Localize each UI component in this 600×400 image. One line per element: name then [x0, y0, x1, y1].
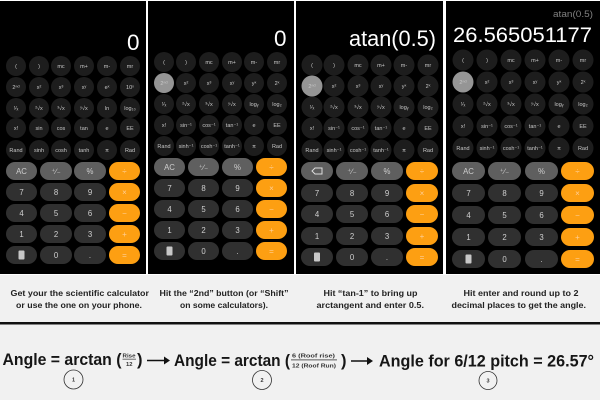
scientific keys: ) [333, 63, 335, 69]
caption: step 1: or use the one on your phone. [16, 300, 142, 310]
number keys: . [386, 253, 388, 262]
operator keys: + [420, 232, 425, 241]
caption: step 3: arctangent and enter 0.5. [316, 300, 424, 310]
scientific keys: EE [579, 124, 587, 130]
scientific keys: ʸ√x [530, 101, 539, 108]
scientific keys: xʸ [533, 80, 537, 86]
number keys: 1 [19, 230, 24, 239]
scientific keys: ( [163, 60, 165, 66]
caption: step 4: Hit enter and round up to 2 [464, 288, 579, 298]
operator keys [256, 158, 287, 260]
scientific keys: π [557, 146, 561, 152]
scientific keys: mr [580, 58, 586, 64]
scientific keys: ²√x [330, 104, 338, 111]
scientific keys: logᵧ [399, 105, 409, 111]
scientific keys: e [252, 123, 256, 129]
operator keys: − [420, 210, 425, 219]
scientific keys: log₂ [423, 105, 433, 111]
scientific keys: sinh⁻¹ [480, 146, 495, 152]
scientific keys: e [105, 126, 109, 132]
scientific keys: sinh [34, 148, 44, 154]
scientific keys: ³√x [57, 105, 65, 112]
scientific keys: ( [15, 64, 17, 70]
scientific keys: sin⁻¹ [180, 123, 192, 129]
scientific keys: tanh⁻¹ [527, 146, 543, 152]
operator keys: = [575, 255, 580, 264]
scientific keys: ²√x [35, 105, 43, 112]
scientific keys: Rad [578, 146, 588, 152]
operator keys: = [122, 251, 127, 260]
scientific keys: x³ [509, 80, 513, 86]
arrow 2 [351, 357, 373, 365]
scientific keys: π [105, 148, 109, 154]
scientific keys: m+ [228, 60, 236, 66]
formula 2: angle equals arctan of roof rise over roof run: ) [341, 351, 346, 370]
caption: step 4 [452, 288, 586, 310]
step marker 2 [252, 370, 272, 390]
scientific keys: 2ˣ [426, 84, 431, 90]
scientific keys: mc [205, 60, 213, 66]
scientific keys: cos⁻¹ [504, 124, 518, 130]
number keys: 3 [539, 233, 544, 242]
operator keys: ÷ [122, 167, 127, 176]
operator keys: + [269, 226, 274, 235]
scientific keys: mr [425, 63, 431, 69]
operator keys: − [269, 205, 274, 214]
scientific keys: 2ⁿᵈ [459, 79, 467, 86]
scientific keys: cosh⁻¹ [201, 144, 217, 150]
operator keys [109, 162, 140, 264]
scientific keys: Rad [125, 148, 135, 154]
scientific keys: m- [104, 64, 110, 70]
number keys [452, 162, 558, 268]
scientific keys: tanh [79, 148, 89, 154]
number keys: 9 [385, 189, 389, 198]
scientific keys: eˣ [105, 85, 110, 91]
scientific keys: mr [127, 64, 133, 70]
scientific keys: ³√x [507, 101, 515, 108]
scientific keys: e [402, 126, 406, 132]
number keys: 0 [502, 255, 507, 264]
operator keys: × [269, 184, 274, 193]
operator keys: − [122, 209, 127, 218]
number keys: 0 [54, 251, 59, 260]
scientific keys: tan⁻¹ [375, 126, 387, 132]
number keys: 4 [167, 205, 172, 214]
operator keys: × [122, 188, 127, 197]
scientific keys: cosh⁻¹ [503, 146, 519, 152]
scientific keys: 2ⁿᵈ [160, 80, 168, 87]
formula 3: result: Angle for 6/12 pitch = 26.57° [379, 352, 594, 370]
caption strip background [0, 276, 600, 323]
scientific keys: x³ [59, 85, 63, 91]
display: 0: 0 [127, 30, 140, 55]
number keys: 9 [539, 189, 544, 198]
scientific keys: x! [310, 126, 315, 132]
number keys [6, 162, 106, 264]
number keys: 7 [19, 188, 24, 197]
number keys: % [538, 167, 545, 176]
formula 1: angle equals arctan of rise over 12: 12 [126, 362, 133, 368]
scientific keys: logᵧ [554, 102, 564, 108]
operator keys: − [575, 211, 580, 220]
number keys: 9 [88, 188, 92, 197]
scientific keys: ¹⁄ₓ [461, 102, 465, 108]
formula 1: angle equals arctan of rise over 12: ) [137, 350, 142, 369]
number keys: % [234, 163, 241, 172]
number keys: 2 [201, 226, 206, 235]
operator keys: ÷ [269, 163, 274, 172]
number keys: AC [16, 167, 27, 176]
scientific keys: Rad [423, 148, 433, 154]
scientific keys: π [252, 144, 256, 150]
panel: step 3 calculator [296, 1, 443, 274]
display: 0: 0 [274, 26, 286, 51]
scientific keys: logᵧ [249, 102, 259, 108]
scientific keys: tan [80, 126, 88, 132]
scientific keys: m+ [80, 64, 88, 70]
scientific keys: xʸ [230, 81, 234, 87]
scientific keys: x² [485, 80, 489, 86]
formula 2: angle equals arctan of roof rise over roof run: 12 (Roof Run) [292, 364, 336, 370]
caption: step 1 [10, 288, 150, 310]
number keys: 5 [502, 211, 507, 220]
formula 2: angle equals arctan of roof rise over roof run: 6 (Roof rise) [292, 354, 335, 360]
scientific keys: sin⁻¹ [481, 124, 493, 130]
scientific keys: m- [401, 63, 407, 69]
scientific keys: ʸ√x [376, 104, 385, 111]
number keys: 3 [235, 226, 240, 235]
scientific keys: x! [162, 123, 167, 129]
number keys: 7 [466, 189, 471, 198]
number keys: 4 [315, 210, 320, 219]
number keys: 0 [201, 247, 206, 256]
scientific keys: m+ [377, 63, 385, 69]
step marker 2: 2 [260, 378, 264, 384]
number keys: . [89, 251, 91, 260]
number keys: ⁺∕₋ [500, 167, 509, 176]
number keys [301, 162, 403, 266]
number keys: 3 [88, 230, 92, 239]
step marker 1 [64, 370, 83, 389]
scientific keys: 2ⁿᵈ [308, 83, 316, 90]
scientific keys: m- [556, 58, 562, 64]
number keys: ⁺∕₋ [199, 163, 208, 172]
scientific keys: cos⁻¹ [202, 123, 216, 129]
scientific keys: ln [105, 106, 109, 112]
scientific keys: ) [486, 58, 488, 64]
number keys: 2 [54, 230, 58, 239]
operator keys: + [575, 233, 580, 242]
number keys: 7 [167, 184, 172, 193]
number keys: 7 [315, 189, 319, 198]
number keys: 6 [235, 205, 240, 214]
panel: step 2 calculator [148, 1, 294, 274]
scientific keys: sin⁻¹ [328, 126, 340, 132]
operator keys [561, 162, 594, 268]
scientific keys: ³√x [205, 101, 213, 108]
scientific keys: ¹⁄ₓ [14, 106, 18, 112]
scientific keys: sinh⁻¹ [179, 144, 194, 150]
number keys: 5 [201, 205, 206, 214]
scientific keys: Rand [157, 144, 171, 150]
scientific keys: mc [507, 58, 515, 64]
scientific keys: 2ˣ [581, 80, 586, 86]
scientific keys: m- [251, 60, 257, 66]
number keys: 1 [466, 233, 471, 242]
scientific keys: x³ [356, 84, 360, 90]
scientific keys: ) [185, 60, 187, 66]
operator keys [406, 162, 438, 266]
scientific keys: ʸ√x [79, 105, 88, 112]
scientific keys: log₂ [272, 102, 282, 108]
caption: step 3: Hit “tan-1” to bring up [324, 288, 418, 298]
scientific keys: ( [462, 58, 464, 64]
scientific keys: yˣ [402, 84, 406, 90]
number keys: % [87, 167, 94, 176]
scientific keys: log₂ [578, 102, 588, 108]
scientific keys: mc [354, 63, 362, 69]
number keys: 3 [385, 232, 389, 241]
number keys: 4 [466, 211, 471, 220]
display: previous expression: atan(0.5) [553, 9, 593, 20]
scientific keys [6, 56, 140, 160]
scientific keys [154, 52, 287, 156]
operator keys: = [420, 253, 425, 262]
scientific keys: Rand [305, 148, 319, 154]
number keys: 8 [350, 189, 354, 198]
scientific keys: ( [311, 63, 313, 69]
number keys: 6 [539, 211, 544, 220]
number keys: 6 [385, 210, 389, 219]
step marker 3: 3 [486, 378, 490, 384]
scientific keys: log₁₀ [124, 106, 136, 112]
scientific keys: tanh⁻¹ [224, 144, 240, 150]
scientific keys: ) [38, 64, 40, 70]
operator keys: + [122, 230, 127, 239]
number keys: 5 [54, 209, 59, 218]
scientific keys: ²√x [483, 101, 491, 108]
caption: step 2: Hit the “2nd” button (or “Shift” [160, 288, 288, 298]
operator keys: × [575, 189, 580, 198]
number keys: ⁺∕₋ [51, 167, 61, 176]
scientific keys: 10ˣ [126, 85, 134, 91]
number keys: 5 [350, 210, 355, 219]
icon: backspace [312, 168, 322, 174]
scientific keys: ¹⁄ₓ [162, 102, 166, 108]
number keys: . [540, 255, 543, 264]
number keys: 8 [201, 184, 206, 193]
operator keys: ÷ [575, 167, 580, 176]
scientific keys: EE [126, 126, 134, 132]
scientific keys: cos [57, 126, 66, 132]
number keys: 0 [350, 253, 355, 262]
step marker 3 [479, 372, 497, 390]
scientific keys [302, 54, 438, 160]
scientific keys: x² [332, 84, 336, 90]
scientific keys: xʸ [82, 85, 86, 91]
number keys: 8 [54, 188, 58, 197]
number keys: ⁺∕₋ [347, 167, 357, 176]
scientific keys: ¹⁄ₓ [310, 105, 314, 111]
scientific keys [452, 50, 594, 158]
scientific keys: cosh [55, 148, 67, 154]
caption: step 4: decimal places to get the angle. [452, 300, 586, 310]
number keys: 2 [350, 232, 354, 241]
scientific keys: cos⁻¹ [351, 126, 365, 132]
number keys: . [236, 247, 239, 256]
caption: step 1: Get your the scientific calculator [10, 288, 150, 298]
panel: step 4 calculator [446, 1, 600, 274]
number keys: AC [463, 167, 474, 176]
display: atan(0.5): atan(0.5) [349, 26, 436, 51]
scientific keys: 2ⁿᵈ [12, 84, 20, 91]
number keys: 9 [235, 184, 240, 193]
number keys: AC [164, 163, 175, 172]
scientific keys: xʸ [379, 84, 383, 90]
panel: step 1 calculator [0, 1, 146, 274]
number keys: 4 [19, 209, 24, 218]
scientific keys: mr [274, 60, 280, 66]
scientific keys: x! [14, 126, 19, 132]
scientific keys: Rand [9, 148, 23, 154]
scientific keys: x³ [207, 81, 211, 87]
display: result: 26.565051177 [453, 22, 592, 47]
scientific keys: ʸ√x [227, 101, 236, 108]
scientific keys: tanh⁻¹ [373, 148, 389, 154]
caption: step 2: on some calculators). [180, 300, 268, 310]
scientific keys: π [402, 148, 406, 154]
scientific keys: Rand [456, 146, 470, 152]
scientific keys: EE [424, 126, 432, 132]
scientific keys: tan⁻¹ [226, 123, 238, 129]
number keys: 6 [88, 209, 92, 218]
number keys: 1 [167, 226, 172, 235]
caption: step 3 [316, 288, 424, 310]
formula 1: angle equals arctan of rise over 12: Angle = arctan ( [2, 350, 122, 369]
operator keys: ÷ [420, 167, 425, 176]
scientific keys: x² [184, 81, 188, 87]
number keys [154, 158, 253, 260]
scientific keys: sinh⁻¹ [327, 148, 342, 154]
scientific keys: sin [35, 126, 43, 132]
number keys: 1 [315, 232, 319, 241]
formula 2: angle equals arctan of roof rise over roof run: Angle = arctan ( [174, 351, 290, 370]
scientific keys: 2ˣ [275, 81, 280, 87]
formula 1: angle equals arctan of rise over 12: Rise [122, 354, 136, 360]
operator keys: = [269, 247, 274, 256]
scientific keys: m+ [531, 58, 539, 64]
scientific keys: ³√x [354, 104, 362, 111]
caption: step 2 [160, 288, 288, 310]
scientific keys: x² [37, 85, 41, 91]
step marker 1: 1 [72, 378, 75, 384]
number keys: % [384, 167, 391, 176]
scientific keys: ²√x [182, 101, 190, 108]
number keys: 2 [502, 233, 507, 242]
scientific keys: tan⁻¹ [529, 124, 541, 130]
scientific keys: mc [57, 64, 65, 70]
scientific keys: x! [461, 124, 466, 130]
number keys: 8 [502, 189, 507, 198]
scientific keys: yˣ [557, 80, 561, 86]
divider line [0, 322, 600, 324]
arrow 1 [147, 356, 170, 364]
scientific keys: Rad [272, 144, 282, 150]
scientific keys: EE [273, 123, 281, 129]
scientific keys: cosh⁻¹ [350, 148, 366, 154]
scientific keys: e [557, 124, 561, 130]
scientific keys: yˣ [252, 81, 256, 87]
operator keys: × [420, 189, 425, 198]
